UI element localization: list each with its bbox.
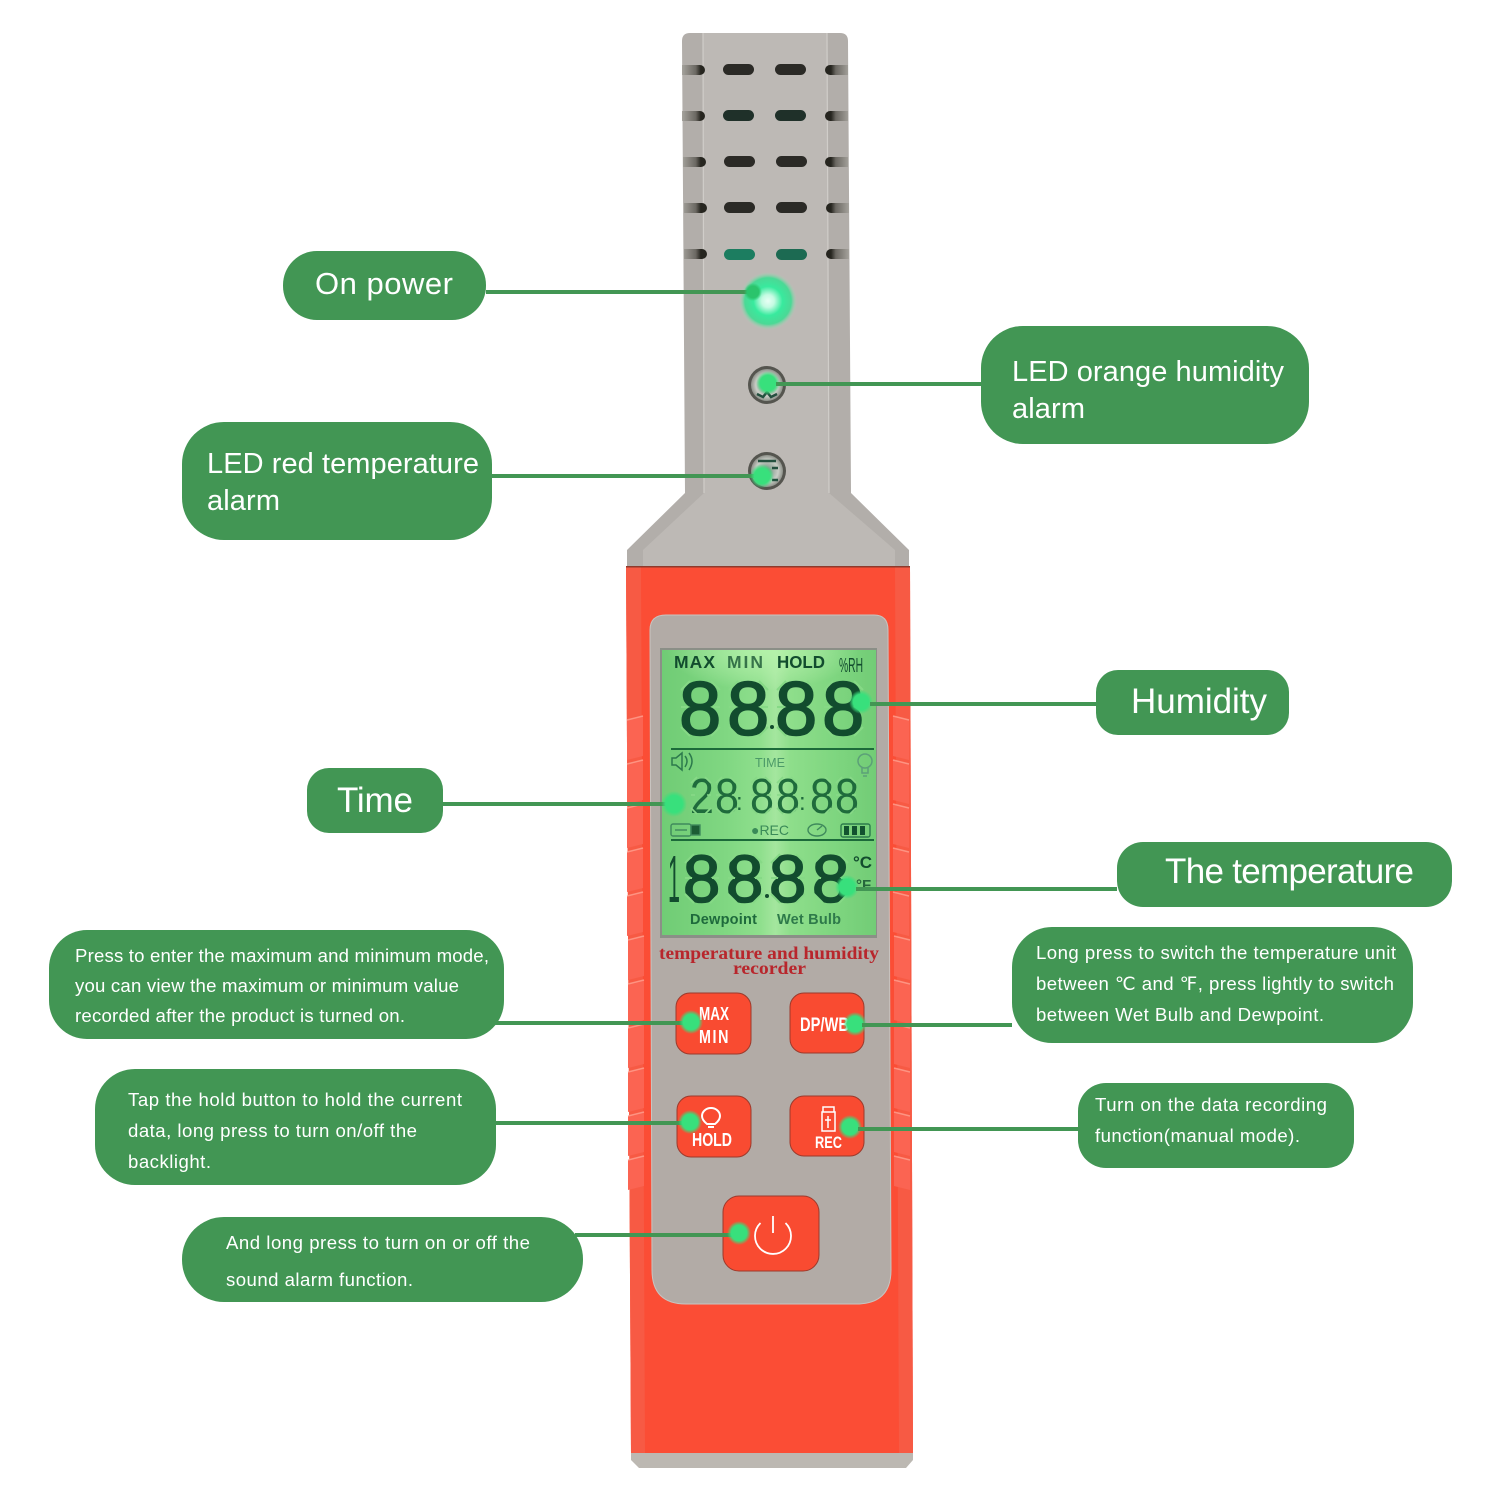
icon: bulb — [858, 754, 872, 776]
Dewpoint label: Dewpoint — [690, 912, 757, 928]
temperature digits: 8888 — [683, 842, 849, 917]
red body — [626, 566, 913, 1468]
product name: temperature and humidity — [659, 943, 879, 963]
callout: record description: function(manual mode). — [1095, 1125, 1300, 1146]
callout: max min description — [49, 930, 504, 1039]
button: power — [723, 1196, 819, 1271]
callout: unit switch description: Long press to switch the temperature unit — [1036, 942, 1397, 963]
callout: hold description: backlight. — [128, 1151, 211, 1172]
callout: sound alarm description: And long press to turn on or off the — [226, 1232, 530, 1253]
probe vent slots — [682, 64, 849, 260]
product name: recorder — [733, 958, 806, 978]
LCD status labels: MIN — [727, 652, 763, 672]
time digits: :: — [736, 789, 806, 816]
connector: LED orange humidity alarm — [756, 371, 981, 395]
LCD status labels: %RH — [839, 655, 863, 677]
callout: LED orange humidity alarm: LED orange humidity — [1012, 356, 1284, 388]
callout: max min description: Press to enter the maximum and minimum mode, — [75, 945, 489, 966]
divider lower — [671, 839, 874, 841]
callout: hold description: Tap the hold button to hold the current — [128, 1089, 463, 1110]
connector: LED red temperature alarm — [492, 464, 774, 488]
connector: HOLD — [496, 1110, 702, 1134]
callout: Humidity: Humidity — [1131, 682, 1268, 721]
time digits: 288888 — [690, 768, 859, 824]
LCD status labels: HOLD — [777, 652, 825, 672]
LCD status labels: MAX — [674, 652, 715, 672]
callout: record description — [1078, 1083, 1354, 1168]
callout: LED orange humidity alarm — [981, 326, 1309, 444]
callout: LED red temperature alarm: alarm — [207, 485, 280, 517]
callout: On power: On power — [315, 266, 453, 301]
Wet Bulb label: Wet Bulb — [777, 912, 841, 928]
callout: unit switch description: between Wet Bulb and Dewpoint. — [1036, 1004, 1324, 1025]
front control panel — [650, 615, 891, 1304]
button: DP/WB — [790, 993, 864, 1053]
callout: unit switch description: between ℃ and ℉, press lightly to switch — [1036, 973, 1394, 994]
button: MAX MIN: MAX — [699, 1004, 729, 1024]
button: REC: REC — [815, 1133, 842, 1152]
record indicator: ●REC — [751, 822, 789, 838]
unit C: °C — [853, 853, 872, 872]
callout: The temperature: The temperature — [1165, 852, 1414, 891]
callout: max min description: recorded after the product is turned on. — [75, 1005, 405, 1026]
time label: TIME — [755, 755, 785, 770]
connector: The temperature — [835, 875, 1117, 899]
orange humidity LED — [748, 366, 786, 404]
connector: Time — [443, 791, 687, 817]
callout: Time: Time — [337, 781, 413, 820]
button: HOLD — [677, 1096, 751, 1157]
side grips — [627, 716, 910, 1190]
connector: MAX MIN — [495, 1010, 703, 1034]
connector: power button — [575, 1221, 751, 1245]
humidity digits: 8888 — [679, 667, 864, 752]
callout: LED red temperature alarm: LED red temperature — [207, 448, 479, 480]
power LED glow — [739, 272, 797, 330]
connector: Humidity — [849, 690, 1096, 714]
connector: DP/WB — [843, 1012, 1012, 1036]
product name — [659, 943, 879, 978]
callout: Time — [307, 768, 443, 833]
icon: battery — [841, 824, 870, 837]
callout: LED orange humidity alarm: alarm — [1012, 393, 1085, 425]
red temperature LED — [748, 452, 786, 490]
callout: On power — [283, 251, 486, 320]
button: REC — [790, 1096, 864, 1156]
LCD screen — [660, 648, 877, 938]
callout: hold description: data, long press to turn on/off the — [128, 1120, 417, 1141]
callout: max min description: you can view the maximum or minimum value — [75, 975, 459, 996]
temperature digits: 1 — [668, 842, 680, 917]
callout: record description: Turn on the data recording — [1095, 1094, 1327, 1115]
LCD status labels — [674, 652, 863, 677]
callout: unit switch description — [1012, 927, 1413, 1043]
callout: LED red temperature alarm — [182, 422, 492, 540]
callout: The temperature — [1117, 842, 1452, 907]
connector: On power — [486, 283, 762, 301]
unit F: °F — [856, 877, 871, 894]
connector: REC — [838, 1115, 1078, 1139]
callout: sound alarm description: sound alarm function. — [226, 1269, 413, 1290]
divider upper — [671, 748, 874, 750]
icon: clock gauge — [808, 824, 826, 836]
button: DP/WB: DP/WB — [800, 1015, 849, 1036]
button: HOLD: HOLD — [692, 1130, 732, 1150]
callout: sound alarm description — [182, 1217, 583, 1302]
icon: USB plug — [671, 824, 700, 836]
callout: hold description — [95, 1069, 496, 1185]
callout: Humidity — [1096, 670, 1289, 735]
device: temperature and humidity meter — [626, 33, 913, 1468]
probe head — [627, 33, 909, 570]
button: MAX MIN: MIN — [699, 1027, 730, 1047]
button: MAX MIN — [676, 993, 751, 1054]
icon: speaker — [672, 753, 692, 770]
